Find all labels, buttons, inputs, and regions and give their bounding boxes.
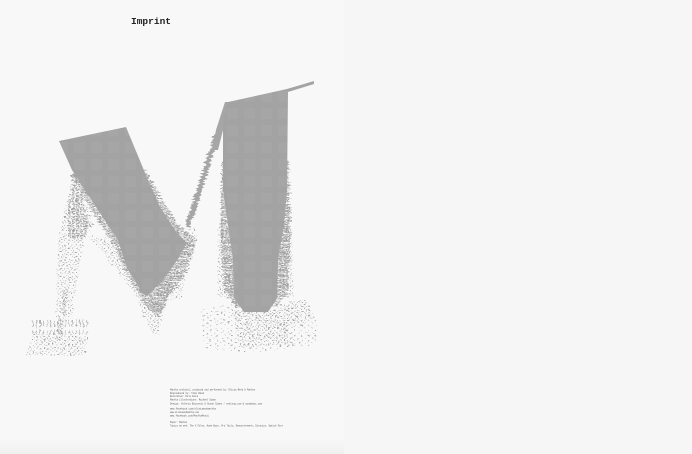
credits text: Reproduced by: Time Reed bbox=[170, 391, 204, 395]
credits text: www.facebook.com/oliviaandmantka bbox=[170, 406, 216, 410]
left foot bbox=[25, 318, 88, 355]
fuzzy edge of diagonal bbox=[88, 225, 197, 336]
credits text: Paper: Mantka bbox=[170, 420, 187, 424]
credits text: Design: Valerio Boccardi & Susan Simon / zeitung.com & acadamic.com bbox=[170, 402, 262, 406]
solid right stem with serif bbox=[223, 81, 314, 312]
credits text: Topics we met: The X Files, Home Boys, Pro Tools, Demonstrement, Dirspice, Switch Fire bbox=[170, 424, 283, 428]
left thin stem bbox=[56, 172, 94, 318]
right foot bbox=[200, 298, 318, 352]
title: Imprint bbox=[131, 16, 171, 27]
credits text bbox=[170, 388, 283, 428]
credits text: www.oliviaandmantka.com bbox=[170, 410, 199, 414]
left poster page bbox=[0, 0, 344, 454]
right stem fuzz bbox=[218, 220, 293, 298]
halftone letter M bbox=[25, 81, 318, 355]
credits text: Restoration: Chris Kenna bbox=[170, 394, 198, 398]
credits text: www.facebook.com/MantkaMusic bbox=[170, 414, 209, 418]
credits text: Mantka archival, produced and performed by: Olivia Reed & Mantka bbox=[170, 388, 255, 392]
credits text: Mantka illustrations: Michael Simon bbox=[170, 398, 216, 402]
jagged dense edge of diagonal bbox=[70, 172, 196, 318]
thin connecting diagonal, jagged lower part bbox=[185, 135, 219, 228]
jagged dense edge of right stem bbox=[220, 160, 291, 308]
thin connecting diagonal, upper part bbox=[212, 102, 231, 150]
solid diagonal bbox=[59, 127, 187, 296]
